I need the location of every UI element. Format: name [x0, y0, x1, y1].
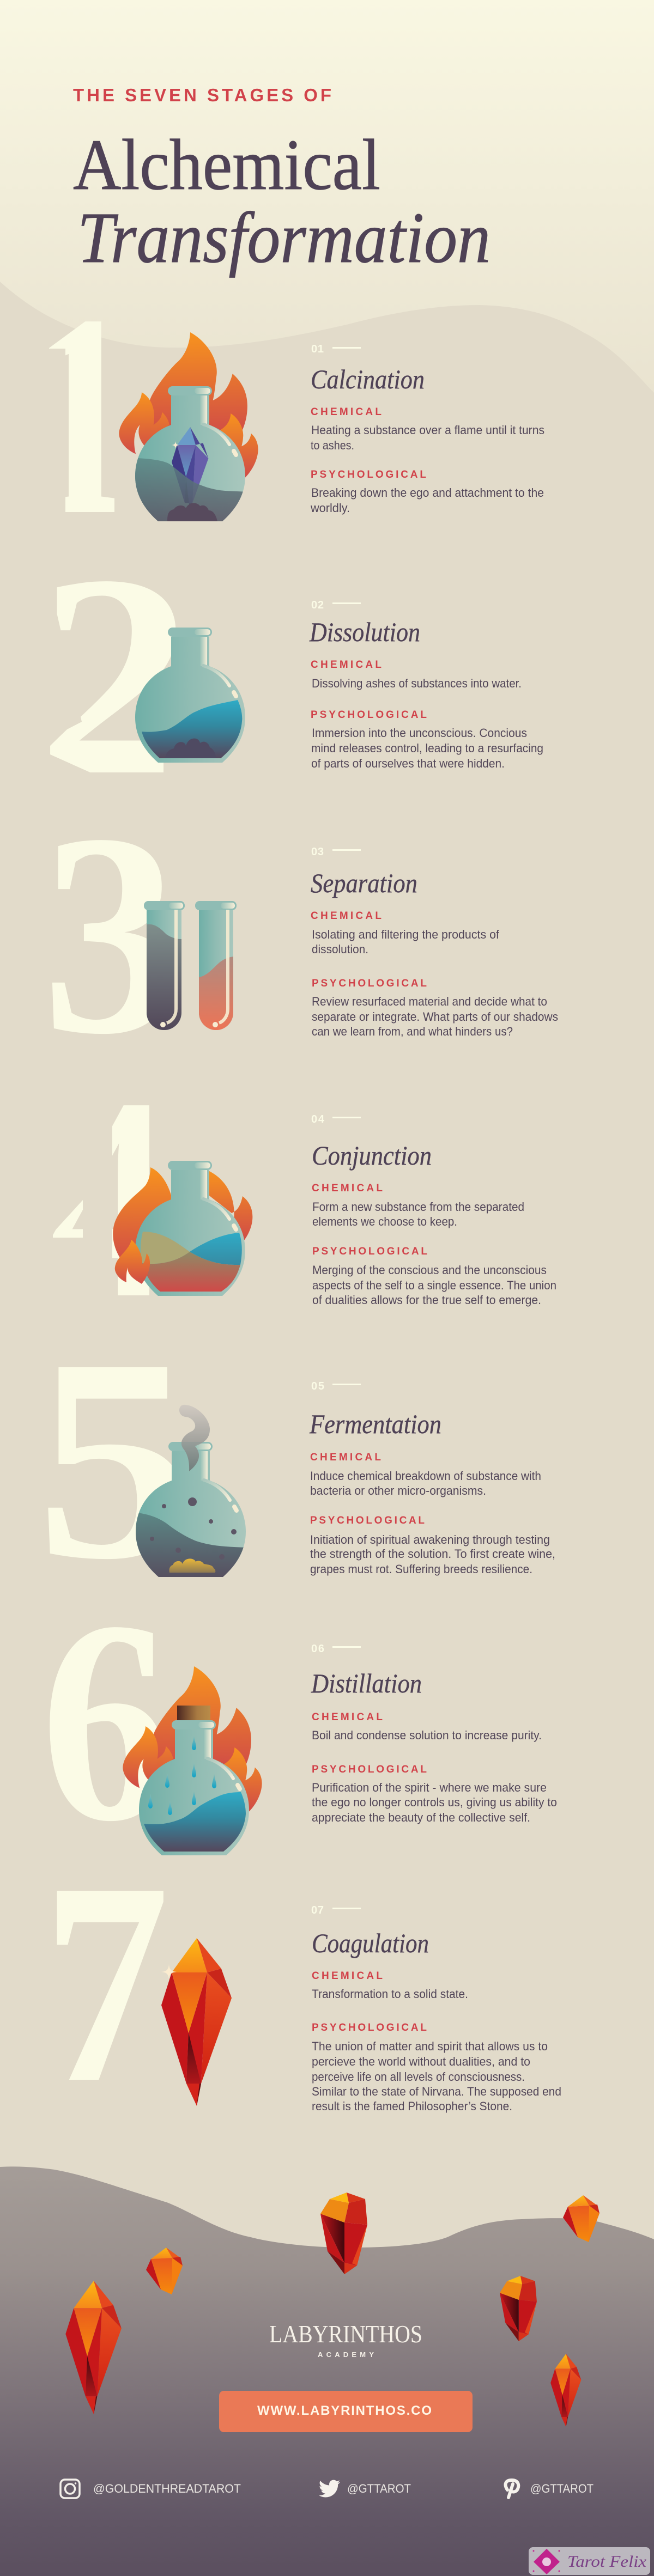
chemical text: [310, 1469, 541, 1497]
heading: Conjunction: Conjunction: [312, 1140, 432, 1171]
tube 2: [195, 901, 237, 1030]
psychological text: aspects of the self to a single essence. The union: [312, 1278, 556, 1292]
psychological text: Immersion into the unconscious. Concious: [312, 726, 527, 740]
numeral 6: 6: [41, 1562, 171, 1881]
psychological text: grapes must rot. Suffering breeds resilience.: [310, 1562, 532, 1576]
step number 04: 04: [311, 1113, 325, 1125]
icon: twitter: [319, 2480, 340, 2497]
psychological text: percieve the world without dualities, and to: [312, 2055, 530, 2068]
label: psychological: PSYCHOLOGICAL: [312, 2022, 427, 2033]
psychological text: [311, 726, 543, 770]
logo: [269, 2320, 422, 2359]
psychological text: Purification of the spirit - where we make sure: [312, 1781, 547, 1794]
chemical text: Dissolving ashes of substances into water.: [312, 677, 522, 690]
chemical text: Isolating and filtering the products of: [312, 928, 500, 941]
gem: large left: [65, 2281, 122, 2414]
step number 01: 01: [311, 343, 324, 355]
chemical text: Boil and condense solution to increase purity.: [312, 1728, 542, 1742]
stage 5 panel: [35, 1299, 555, 1619]
psychological text: [312, 1781, 557, 1824]
icon: flask with bubbles, smoke and gold residue: [136, 1405, 246, 1577]
website button: [219, 2391, 473, 2432]
stage 7 panel: [43, 1823, 561, 2142]
icon: red crystal: [161, 1938, 232, 2106]
heading: Calcination: Calcination: [311, 364, 425, 394]
chemical text: dissolution.: [312, 942, 368, 956]
label: chemical: CHEMICAL: [312, 1712, 383, 1723]
watermark text: Tarot Felix: [567, 2553, 647, 2571]
handle: instagram: @GOLDENTHREADTAROT: [93, 2482, 241, 2495]
step number 02: 02: [311, 599, 324, 611]
psychological text: [312, 995, 558, 1038]
gem: top centre: [320, 2193, 367, 2274]
psychological text: of dualities allows for the true self to emerge.: [312, 1293, 541, 1307]
heading: Distillation: Distillation: [311, 1668, 422, 1698]
numeral 5: 5: [35, 1299, 195, 1619]
label: chemical: CHEMICAL: [311, 910, 382, 922]
icon: instagram: [60, 2480, 80, 2498]
psychological text: Review resurfaced material and decide what to: [312, 995, 547, 1008]
logo: ACADEMY: [318, 2350, 374, 2359]
stage 2 panel: [50, 581, 543, 772]
numeral 2: 2: [37, 515, 193, 835]
heading: Coagulation: Coagulation: [312, 1928, 429, 1958]
heading: Separation: Separation: [311, 868, 417, 898]
gem: lower right: [550, 2354, 581, 2427]
chemical text: Form a new substance from the separated: [312, 1200, 524, 1214]
heading: Fermentation: Fermentation: [309, 1409, 441, 1439]
label: psychological: PSYCHOLOGICAL: [312, 1764, 427, 1775]
numeral 3: 3: [42, 774, 179, 1094]
chemical text: Transformation to a solid state.: [312, 1987, 468, 2001]
chemical text: elements we choose to keep.: [312, 1215, 457, 1228]
label: chemical: CHEMICAL: [310, 1452, 381, 1463]
icon: two test tubes: [144, 901, 237, 1030]
psychological text: separate or integrate. What parts of our shadows: [312, 1010, 558, 1024]
eyebrow heading: THE SEVEN STAGES OF: [73, 85, 331, 105]
footer panel: [0, 2166, 654, 2576]
numeral 4: 4: [50, 1039, 169, 1358]
step number 07: 07: [311, 1904, 324, 1916]
psychological text: [310, 486, 544, 515]
chemical text: Heating a substance over a flame until it turns: [311, 423, 544, 437]
psychological text: the strength of the solution. To first create wine,: [310, 1547, 555, 1561]
label: psychological: PSYCHOLOGICAL: [312, 1246, 427, 1257]
label: chemical: CHEMICAL: [311, 406, 382, 418]
psychological text: [310, 1533, 555, 1576]
stage 6 panel: [41, 1562, 557, 1881]
numeral 1: 1: [24, 254, 140, 575]
gem: top right: [563, 2195, 600, 2242]
stage 4 panel: [50, 1039, 556, 1358]
psychological text: appreciate the beauty of the collective self.: [312, 1811, 530, 1824]
icon: corked flask with flames and drops: [123, 1666, 262, 1855]
label: psychological: PSYCHOLOGICAL: [311, 469, 426, 480]
label: chemical: CHEMICAL: [312, 1183, 383, 1194]
logo: LABYRINTHOS: [269, 2320, 422, 2348]
gem: middle right: [500, 2276, 537, 2341]
label: chemical: CHEMICAL: [312, 1970, 383, 1982]
label: chemical: CHEMICAL: [311, 659, 382, 671]
footer wave background: [0, 2166, 654, 2576]
label: psychological: PSYCHOLOGICAL: [312, 978, 427, 989]
psychological text: worldly.: [310, 501, 350, 515]
tube 1: [144, 901, 185, 1030]
step number 05: 05: [311, 1380, 324, 1392]
label: psychological: PSYCHOLOGICAL: [311, 709, 427, 721]
chemical text: Induce chemical breakdown of substance with: [310, 1469, 541, 1483]
psychological text: result is the famed Philosopher’s Stone.: [312, 2099, 512, 2113]
title line 1: Alchemical: [73, 124, 380, 205]
chemical text: [311, 423, 544, 452]
icon: pinterest: [506, 2480, 518, 2498]
watermark badge: [529, 2547, 650, 2575]
gem: small left: [146, 2248, 183, 2294]
title line 2: Transformation: [77, 197, 491, 278]
psychological text: the ego no longer controls us, giving us ability to: [312, 1795, 557, 1809]
numeral 7: 7: [43, 1823, 169, 2142]
icon: flask with flames and crystal: [119, 332, 258, 528]
stage 3 panel: [42, 774, 558, 1094]
psychological text: Initiation of spiritual awakening through testing: [310, 1533, 550, 1546]
psychological text: [312, 1263, 556, 1307]
background: header wave: [0, 0, 654, 393]
chemical text: [312, 1200, 524, 1228]
chemical text: bacteria or other micro-organisms.: [310, 1484, 486, 1497]
psychological text: Breaking down the ego and attachment to the: [311, 486, 544, 500]
psychological text: Similar to the state of Nirvana. The supposed end: [312, 2085, 561, 2098]
psychological text: can we learn from, and what hinders us?: [312, 1025, 513, 1038]
step number 06: 06: [311, 1643, 324, 1655]
step number 03: 03: [311, 846, 324, 858]
psychological text: mind releases control, leading to a resurfacing: [311, 741, 543, 755]
psychological text: Merging of the conscious and the unconscious: [312, 1263, 547, 1277]
chemical text: [312, 928, 500, 956]
label: psychological: PSYCHOLOGICAL: [310, 1515, 425, 1526]
heading: Dissolution: Dissolution: [309, 617, 420, 647]
icon: lotus: [533, 2549, 560, 2574]
icon: flask with water and ash: [135, 628, 245, 763]
stage 1 panel: [49, 321, 544, 521]
psychological text: The union of matter and spirit that allows us to: [312, 2039, 548, 2053]
psychological text: perceive life on all levels of consciousness.: [312, 2070, 525, 2084]
psychological text: [312, 2039, 561, 2113]
psychological text: of parts of ourselves that were hidden.: [311, 757, 505, 770]
icon: flask with mixed liquids and flames: [113, 1161, 252, 1296]
website button: WWW.LABYRINTHOS.CO: [257, 2403, 432, 2418]
chemical text: to ashes.: [311, 439, 354, 452]
handle: twitter: @GTTAROT: [347, 2482, 411, 2495]
handle: pinterest: @GTTAROT: [530, 2482, 594, 2495]
